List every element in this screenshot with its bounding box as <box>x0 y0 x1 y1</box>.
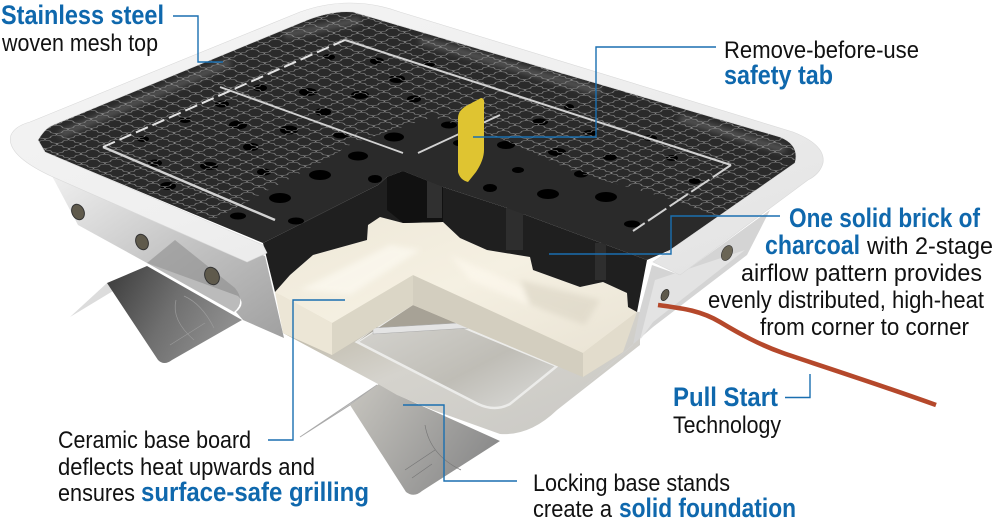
ceramic base board <box>275 217 637 377</box>
callout: pull start: Pull Start <box>673 382 778 412</box>
callout: stainless steel mesh: woven mesh top <box>1 30 158 57</box>
rim of grill tray <box>10 3 823 275</box>
callout: charcoal brick: charcoal <box>765 230 860 260</box>
pull start cord <box>658 305 936 405</box>
callout: charcoal brick <box>708 203 993 341</box>
left outer wall with vent holes <box>52 176 284 338</box>
callout: stainless steel mesh: Stainless steel <box>1 0 164 30</box>
callout: charcoal brick: from corner to corner <box>760 314 969 341</box>
callout: locking base stands: Locking base stands <box>533 470 730 497</box>
callout leader lines <box>173 16 810 481</box>
callout: safety tab: safety tab <box>724 60 833 90</box>
callout: locking base stands: solid foundation <box>619 493 796 523</box>
stainless steel woven mesh <box>38 12 796 220</box>
callout: ceramic base board: ensures <box>58 480 135 507</box>
callout: pull start: Technology <box>673 412 781 439</box>
airflow holes <box>137 54 701 228</box>
icon: front base stand <box>300 380 500 495</box>
callout: charcoal brick: evenly distributed, high-heat <box>708 287 984 314</box>
right outer wall with vent holes <box>557 210 770 410</box>
callout: charcoal brick: airflow pattern provides <box>741 260 982 287</box>
callout: locking base stands <box>533 470 796 523</box>
callout: charcoal brick: with 2-stage <box>866 233 993 260</box>
callout: safety tab: Remove-before-use <box>724 37 919 64</box>
support wires <box>103 40 731 231</box>
callout: pull start <box>673 382 781 439</box>
callout: locking base stands: create a <box>533 496 613 523</box>
callout: ceramic base board: deflects heat upwards and <box>58 454 315 481</box>
remove-before-use safety tab <box>458 98 484 182</box>
charcoal brick <box>38 12 796 312</box>
callout: stainless steel mesh <box>1 0 164 57</box>
callout: ceramic base board: Ceramic base board <box>58 427 251 454</box>
inner wall highlights <box>60 20 785 150</box>
callout: safety tab <box>724 37 919 90</box>
icon: left base stand <box>70 266 242 363</box>
callout: ceramic base board: surface-safe grilling <box>141 477 369 507</box>
callout: ceramic base board <box>58 427 369 507</box>
base tray <box>283 290 640 434</box>
